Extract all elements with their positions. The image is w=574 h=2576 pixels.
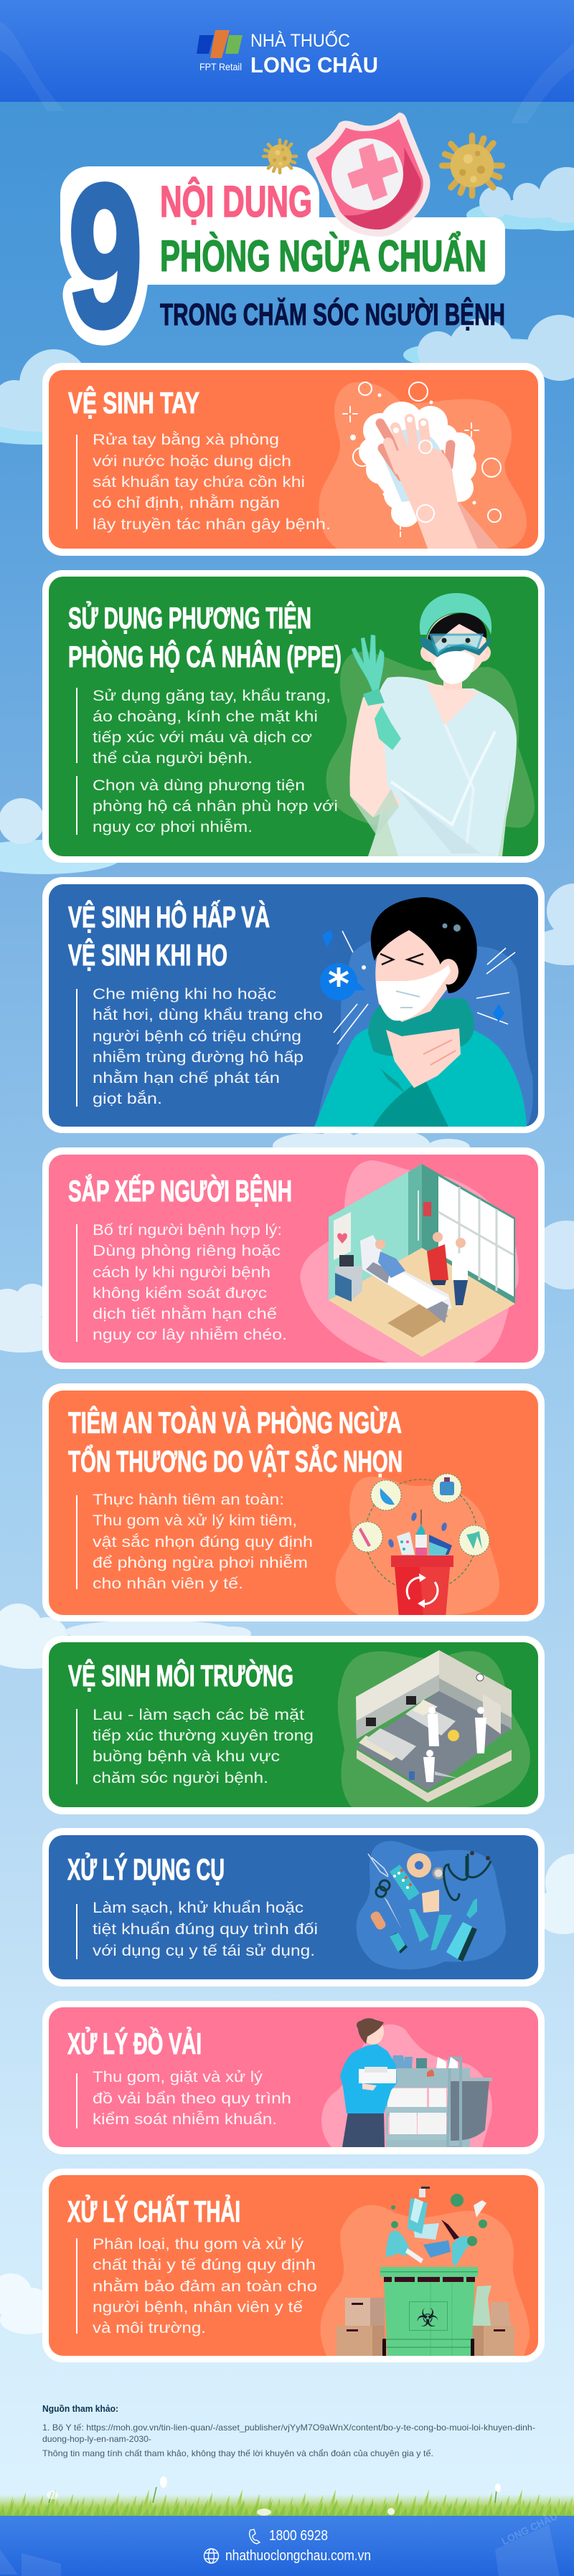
body text: Thực hành tiêm an toàn:: [93, 1492, 284, 1508]
logo text: LONG CHÂU: [250, 52, 378, 77]
body text: cách ly khi người bệnh: [93, 1264, 270, 1281]
panel: vệ sinh hô hấp: [42, 877, 545, 1133]
body text: chất thải y tế đúng quy định: [93, 2257, 316, 2273]
heading: XỬ LÝ DỤNG CỤ: [67, 1852, 225, 1886]
panel: xử lý chất thải: [42, 2169, 545, 2362]
body text: với nước hoặc dung dịch: [93, 453, 291, 470]
panel: phương tiện phòng hộ cá nhân: [42, 570, 545, 863]
body text: giọt bắn.: [93, 1091, 162, 1107]
body text: buồng bệnh và khu vực: [93, 1748, 280, 1765]
big number 9: 9: [68, 143, 143, 369]
body text: để phòng ngừa phơi nhiễm: [93, 1555, 308, 1571]
illustration: medical tools: [357, 1841, 506, 1969]
heading: PHÒNG HỘ CÁ NHÂN (PPE): [68, 639, 342, 673]
icon: globe: [204, 2549, 218, 2563]
illustration: medical waste bin: ☣: [416, 2303, 439, 2333]
body text: nguy cơ lây nhiễm chéo.: [93, 1327, 287, 1343]
card frame: [42, 1383, 545, 1621]
body text: tiếp xúc thường xuyên trong: [93, 1728, 314, 1744]
logo: [197, 29, 378, 77]
phone number: 1800 6928: [269, 2528, 328, 2544]
illustration: sharps recycling bin: [335, 1474, 499, 1617]
body text: Che miệng khi ho hoặc: [93, 986, 276, 1003]
illustration: washing hands: [319, 382, 527, 552]
body text: sát khuẩn tay chứa cồn khi: [93, 474, 305, 491]
references text: Thông tin mang tính chất tham khảo, không thay thế lời khuyên và chẩn đoán của chuyên gia y tế.: [42, 2448, 433, 2458]
panel: vệ sinh tay: [42, 363, 545, 556]
illustration: laundry cart: [321, 2018, 492, 2147]
panel: tiêm an toàn: [42, 1383, 545, 1621]
heading: VỆ SINH TAY: [68, 385, 199, 420]
logo text: [199, 29, 378, 77]
body text: hắt hơi, dùng khẩu trang cho: [93, 1007, 323, 1023]
grass: [0, 2476, 574, 2516]
body text: vật sắc nhọn đúng quy định: [93, 1534, 313, 1550]
body text: có chỉ định, nhằm ngăn: [93, 495, 280, 511]
header band: [0, 0, 574, 123]
illustration: medical waste bin: [321, 2187, 530, 2358]
body text: Chọn và dùng phương tiện: [93, 777, 305, 794]
icon: shield: [307, 113, 430, 237]
heading: VỆ SINH KHI HO: [68, 937, 227, 972]
references heading: Nguồn tham khảo:: [42, 2403, 118, 2414]
icon: phone: [250, 2529, 260, 2544]
body text: [76, 1707, 314, 1786]
references: [42, 2403, 535, 2458]
body text: tiếp xúc với máu và dịch cơ: [93, 729, 312, 746]
body text: thể của người bệnh.: [93, 750, 253, 767]
body text: nhằm bảo đảm an toàn cho: [93, 2278, 317, 2295]
footer band: [0, 2509, 574, 2576]
card frame: [42, 363, 545, 556]
icon: small virus: [263, 140, 296, 173]
body text: [76, 2069, 291, 2128]
body text: nhiễm trùng đường hô hấp: [93, 1049, 304, 1066]
body text: người bệnh có triệu chứng: [93, 1028, 301, 1045]
body text: nguy cơ phơi nhiễm.: [93, 819, 253, 835]
heading: [68, 600, 342, 673]
references text: duong-hop-ly-en-nam-2030-: [42, 2434, 151, 2444]
card frame: [42, 1147, 545, 1369]
illustration: coughing person: [314, 897, 533, 1127]
body text: Lau - làm sạch các bề mặt: [93, 1707, 304, 1723]
panel: sắp xếp người bệnh: [42, 1147, 545, 1369]
heading: SẮP XẾP NGƯỜI BỆNH: [68, 1173, 292, 1208]
heading: [68, 1405, 403, 1478]
body text: với dụng cụ y tế tái sử dụng.: [93, 1943, 315, 1959]
card frame: [42, 877, 545, 1133]
panel: xử lý dụng cụ: [42, 1828, 545, 1987]
references text: 1. Bộ Y tế: https://moh.gov.vn/tin-lien-quan/-/asset_publisher/vjYyM7O9aWnX/content/bo-y-te-cong-bo-muoi-loi-khuyen-dinh-: [42, 2423, 535, 2433]
heading: VỆ SINH MÔI TRƯỜNG: [68, 1658, 293, 1692]
body text: [76, 1492, 313, 1592]
body text: và môi trường.: [93, 2320, 206, 2336]
body text: không kiểm soát được: [93, 1285, 267, 1302]
references text: [42, 2423, 535, 2458]
body text: Phân loại, thu gom và xử lý: [93, 2236, 304, 2253]
body text: phòng hộ cá nhân phù hợp với: [93, 798, 338, 815]
heading: VỆ SINH HÔ HẤP VÀ: [68, 899, 270, 934]
heading: XỬ LÝ ĐỒ VẢI: [67, 2026, 202, 2060]
card frame: [42, 570, 545, 863]
illustration: nurse with gloves: [326, 593, 535, 856]
heading: SỬ DỤNG PHƯƠNG TIỆN: [68, 600, 311, 635]
body text: Thu gom và xử lý kim tiêm,: [93, 1512, 297, 1529]
body text: nhằm hạn chế phát tán: [93, 1070, 280, 1086]
heading: TIÊM AN TOÀN VÀ PHÒNG NGỪA: [68, 1405, 402, 1439]
heading: XỬ LÝ CHẤT THẢI: [67, 2194, 240, 2228]
body text: [76, 1900, 318, 1959]
card frame: [42, 2169, 545, 2362]
title block: [60, 113, 505, 369]
card frame: [42, 1636, 545, 1814]
body text: Thu gom, giặt và xử lý: [93, 2069, 263, 2085]
logo text: FPT Retail: [199, 61, 242, 72]
body text: chăm sóc người bệnh.: [93, 1770, 268, 1786]
body text: cho nhân viên y tế.: [93, 1576, 243, 1592]
body text: Bố trí người bệnh hợp lý:: [93, 1222, 282, 1239]
body text: Rửa tay bằng xà phòng: [93, 432, 279, 448]
heading: [68, 899, 270, 972]
heading: TỔN THƯƠNG DO VẬT SẮC NHỌN: [68, 1443, 403, 1478]
panel: vệ sinh môi trường: [42, 1636, 545, 1814]
body text: [76, 1222, 287, 1343]
body text: [76, 688, 338, 835]
body text: [76, 2236, 317, 2336]
body text: áo choàng, kính che mặt khi: [93, 709, 318, 725]
panel: xử lý đồ vải: [42, 2001, 545, 2154]
body text: dịch tiết nhằm hạn chế: [93, 1306, 277, 1322]
store sign watermark: LONG CHÂU: [499, 2509, 560, 2547]
icon: large virus: [442, 136, 502, 196]
website: nhathuoclongchau.com.vn: [225, 2548, 371, 2564]
body text: [76, 986, 323, 1107]
body text: Sử dụng găng tay, khẩu trang,: [93, 688, 331, 704]
card frame: [42, 1828, 545, 1987]
body text: người bệnh, nhân viên y tế: [93, 2299, 303, 2316]
body text: [76, 432, 331, 533]
body text: Dùng phòng riêng hoặc: [93, 1243, 281, 1259]
illustration: coughing person: *: [328, 960, 349, 1008]
title white backing: [60, 166, 505, 285]
body text: kiểm soát nhiễm khuẩn.: [93, 2111, 277, 2128]
illustration: isometric hospital room: [300, 1160, 519, 1363]
big number 9: 9: [68, 143, 143, 369]
title line: nội dung: NỘI DUNG: [160, 177, 312, 226]
logo text: NHÀ THUỐC: [250, 29, 350, 51]
body text: đồ vải bẩn theo quy trình: [93, 2090, 291, 2107]
card frame: [42, 2001, 545, 2154]
logo mark: [197, 30, 243, 58]
body text: tiệt khuẩn đúng quy trình đối: [93, 1921, 318, 1938]
illustration: disinfected ward: [338, 1650, 530, 1807]
body text: Làm sạch, khử khuẩn hoặc: [93, 1900, 304, 1916]
body text: lây truyền tác nhân gây bệnh.: [93, 516, 331, 533]
